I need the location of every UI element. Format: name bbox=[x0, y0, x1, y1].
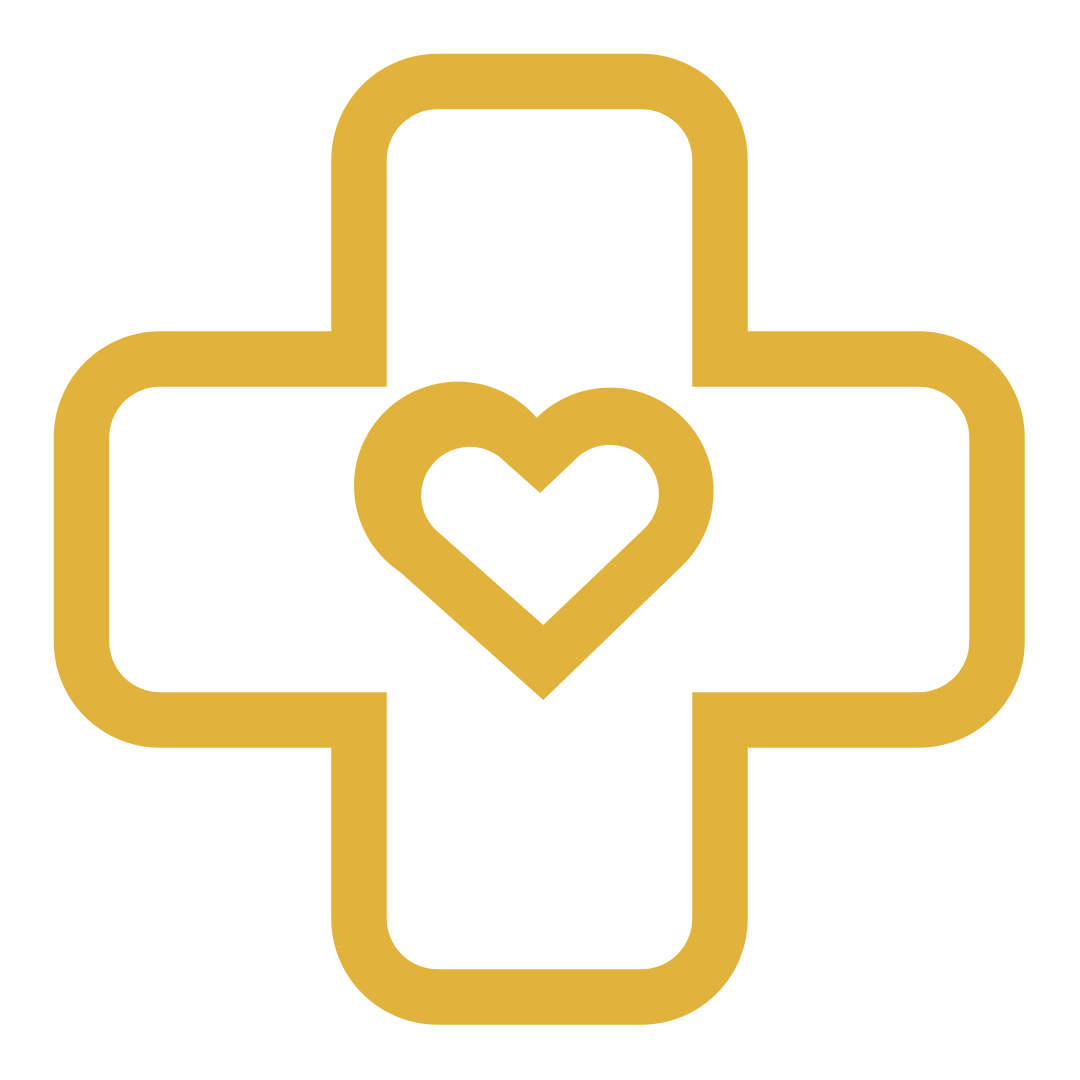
icon: cross outline bbox=[82, 82, 997, 997]
icon: heart outline bbox=[354, 382, 714, 700]
